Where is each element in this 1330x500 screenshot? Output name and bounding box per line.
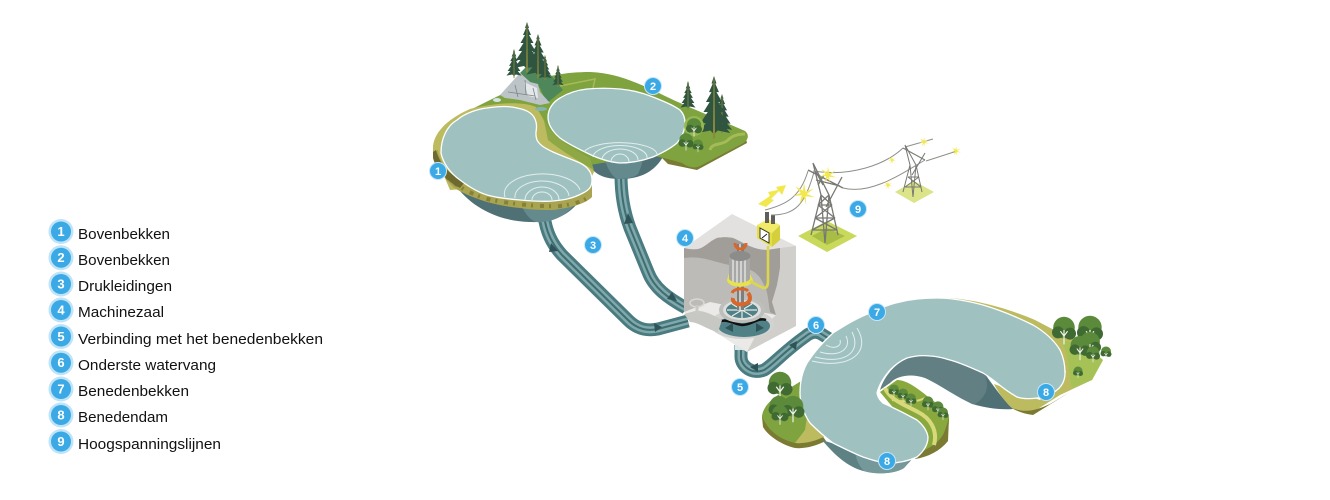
bottom bowl	[822, 440, 914, 473]
lake 2 water	[548, 88, 685, 163]
rim of lake 1	[433, 150, 592, 210]
legend item 1	[48, 219, 170, 244]
marker 2	[644, 78, 662, 94]
marker 6: 6	[813, 320, 819, 332]
legend item 6: 6	[57, 355, 65, 370]
tailrace pipe	[741, 332, 836, 372]
sparks	[793, 137, 961, 205]
rock and hill	[493, 66, 563, 111]
legend item 4: Machinezaal	[78, 304, 164, 321]
fir trees top	[506, 22, 564, 87]
legend item 5: 5	[57, 329, 65, 344]
marker 3: 3	[590, 240, 596, 252]
legend item 8: Benedendam	[78, 409, 168, 426]
legend	[48, 219, 323, 454]
legend item 5: Verbinding met het benedenbekken	[78, 331, 323, 348]
yellow lightning bolt	[758, 185, 786, 207]
legend item 3: Drukleidingen	[78, 278, 172, 295]
marker 1	[430, 162, 446, 180]
legend item 4	[48, 298, 164, 322]
legend item 6: Onderste watervang	[78, 357, 216, 374]
lower basin	[762, 298, 1103, 473]
legend item 3: 3	[57, 276, 65, 292]
inlet valve	[684, 311, 722, 332]
marker 1: 1	[435, 166, 441, 178]
center island	[880, 380, 949, 456]
marker 7: 7	[874, 307, 880, 319]
machine hall	[684, 214, 796, 352]
grass rim	[660, 135, 747, 170]
upper basin land	[433, 72, 748, 222]
marker 8 bottom: 8	[884, 456, 890, 468]
bowl under lake 2	[585, 155, 664, 179]
ripples lower lake	[812, 328, 862, 363]
legend item 8	[48, 402, 168, 428]
back wall	[684, 237, 780, 352]
legend item 2	[48, 245, 170, 270]
marker 8 right: 8	[1043, 387, 1049, 399]
pylon 2	[895, 145, 934, 203]
marker 4	[676, 230, 694, 246]
olive banks	[433, 103, 594, 190]
marker 5	[732, 378, 748, 396]
orange rotation arrows	[735, 243, 746, 249]
trees center island	[888, 384, 948, 420]
marker 9: 9	[855, 204, 861, 216]
fir trees right	[680, 76, 732, 138]
legend item 4: 4	[57, 302, 65, 318]
roof slab	[684, 214, 796, 262]
ripples lake 1	[504, 174, 580, 200]
transformer box	[757, 212, 780, 247]
legend item 1: Bovenbekken	[78, 226, 170, 243]
power lines	[765, 139, 957, 215]
left island	[762, 380, 826, 448]
inner bowl	[880, 352, 1013, 409]
shaft	[737, 244, 744, 310]
trees right bank	[1052, 316, 1112, 378]
legend item 6	[48, 350, 216, 375]
legend item 3	[48, 272, 172, 296]
path right	[710, 134, 745, 150]
legend item 2: 2	[57, 250, 65, 265]
marker 3	[584, 236, 602, 254]
right wall	[747, 246, 796, 352]
legend item 7: Benedenbekken	[78, 383, 189, 400]
right bank	[933, 298, 1103, 413]
spiral casing	[710, 309, 774, 339]
grass plateau	[433, 72, 748, 170]
legend item 7	[48, 376, 189, 402]
runner	[719, 297, 765, 323]
marker 8 bottom	[878, 452, 896, 470]
marker 7	[868, 304, 886, 320]
wall shade	[684, 237, 780, 315]
legend item 8: 8	[57, 408, 65, 422]
legend item 9: Hoogspanningslijnen	[78, 436, 221, 453]
legend item 9: 9	[57, 434, 65, 449]
lake 1 water	[441, 106, 592, 201]
legend item 2: Bovenbekken	[78, 252, 170, 269]
trees left island	[768, 372, 804, 425]
legend item 1: 1	[57, 224, 65, 239]
legend item 7: 7	[57, 382, 65, 396]
marker 4: 4	[682, 233, 689, 245]
lower lake water	[800, 298, 1065, 463]
legend item 9	[48, 429, 221, 454]
marker 6	[808, 316, 824, 334]
pylon 1	[798, 163, 857, 252]
legend item 5	[48, 324, 323, 349]
ripples lake 2	[584, 143, 657, 162]
marker 9	[850, 200, 866, 218]
marker 2: 2	[650, 81, 656, 93]
bowl under lake 1	[456, 186, 580, 222]
round trees upper	[678, 116, 704, 152]
penstock pipes	[544, 175, 688, 330]
pipe arrows	[549, 213, 677, 332]
generator	[729, 254, 750, 283]
floor	[684, 302, 776, 352]
marker 5: 5	[737, 382, 743, 394]
collar	[727, 273, 753, 287]
number markers	[430, 78, 1054, 470]
marker 8 right	[1038, 384, 1054, 400]
